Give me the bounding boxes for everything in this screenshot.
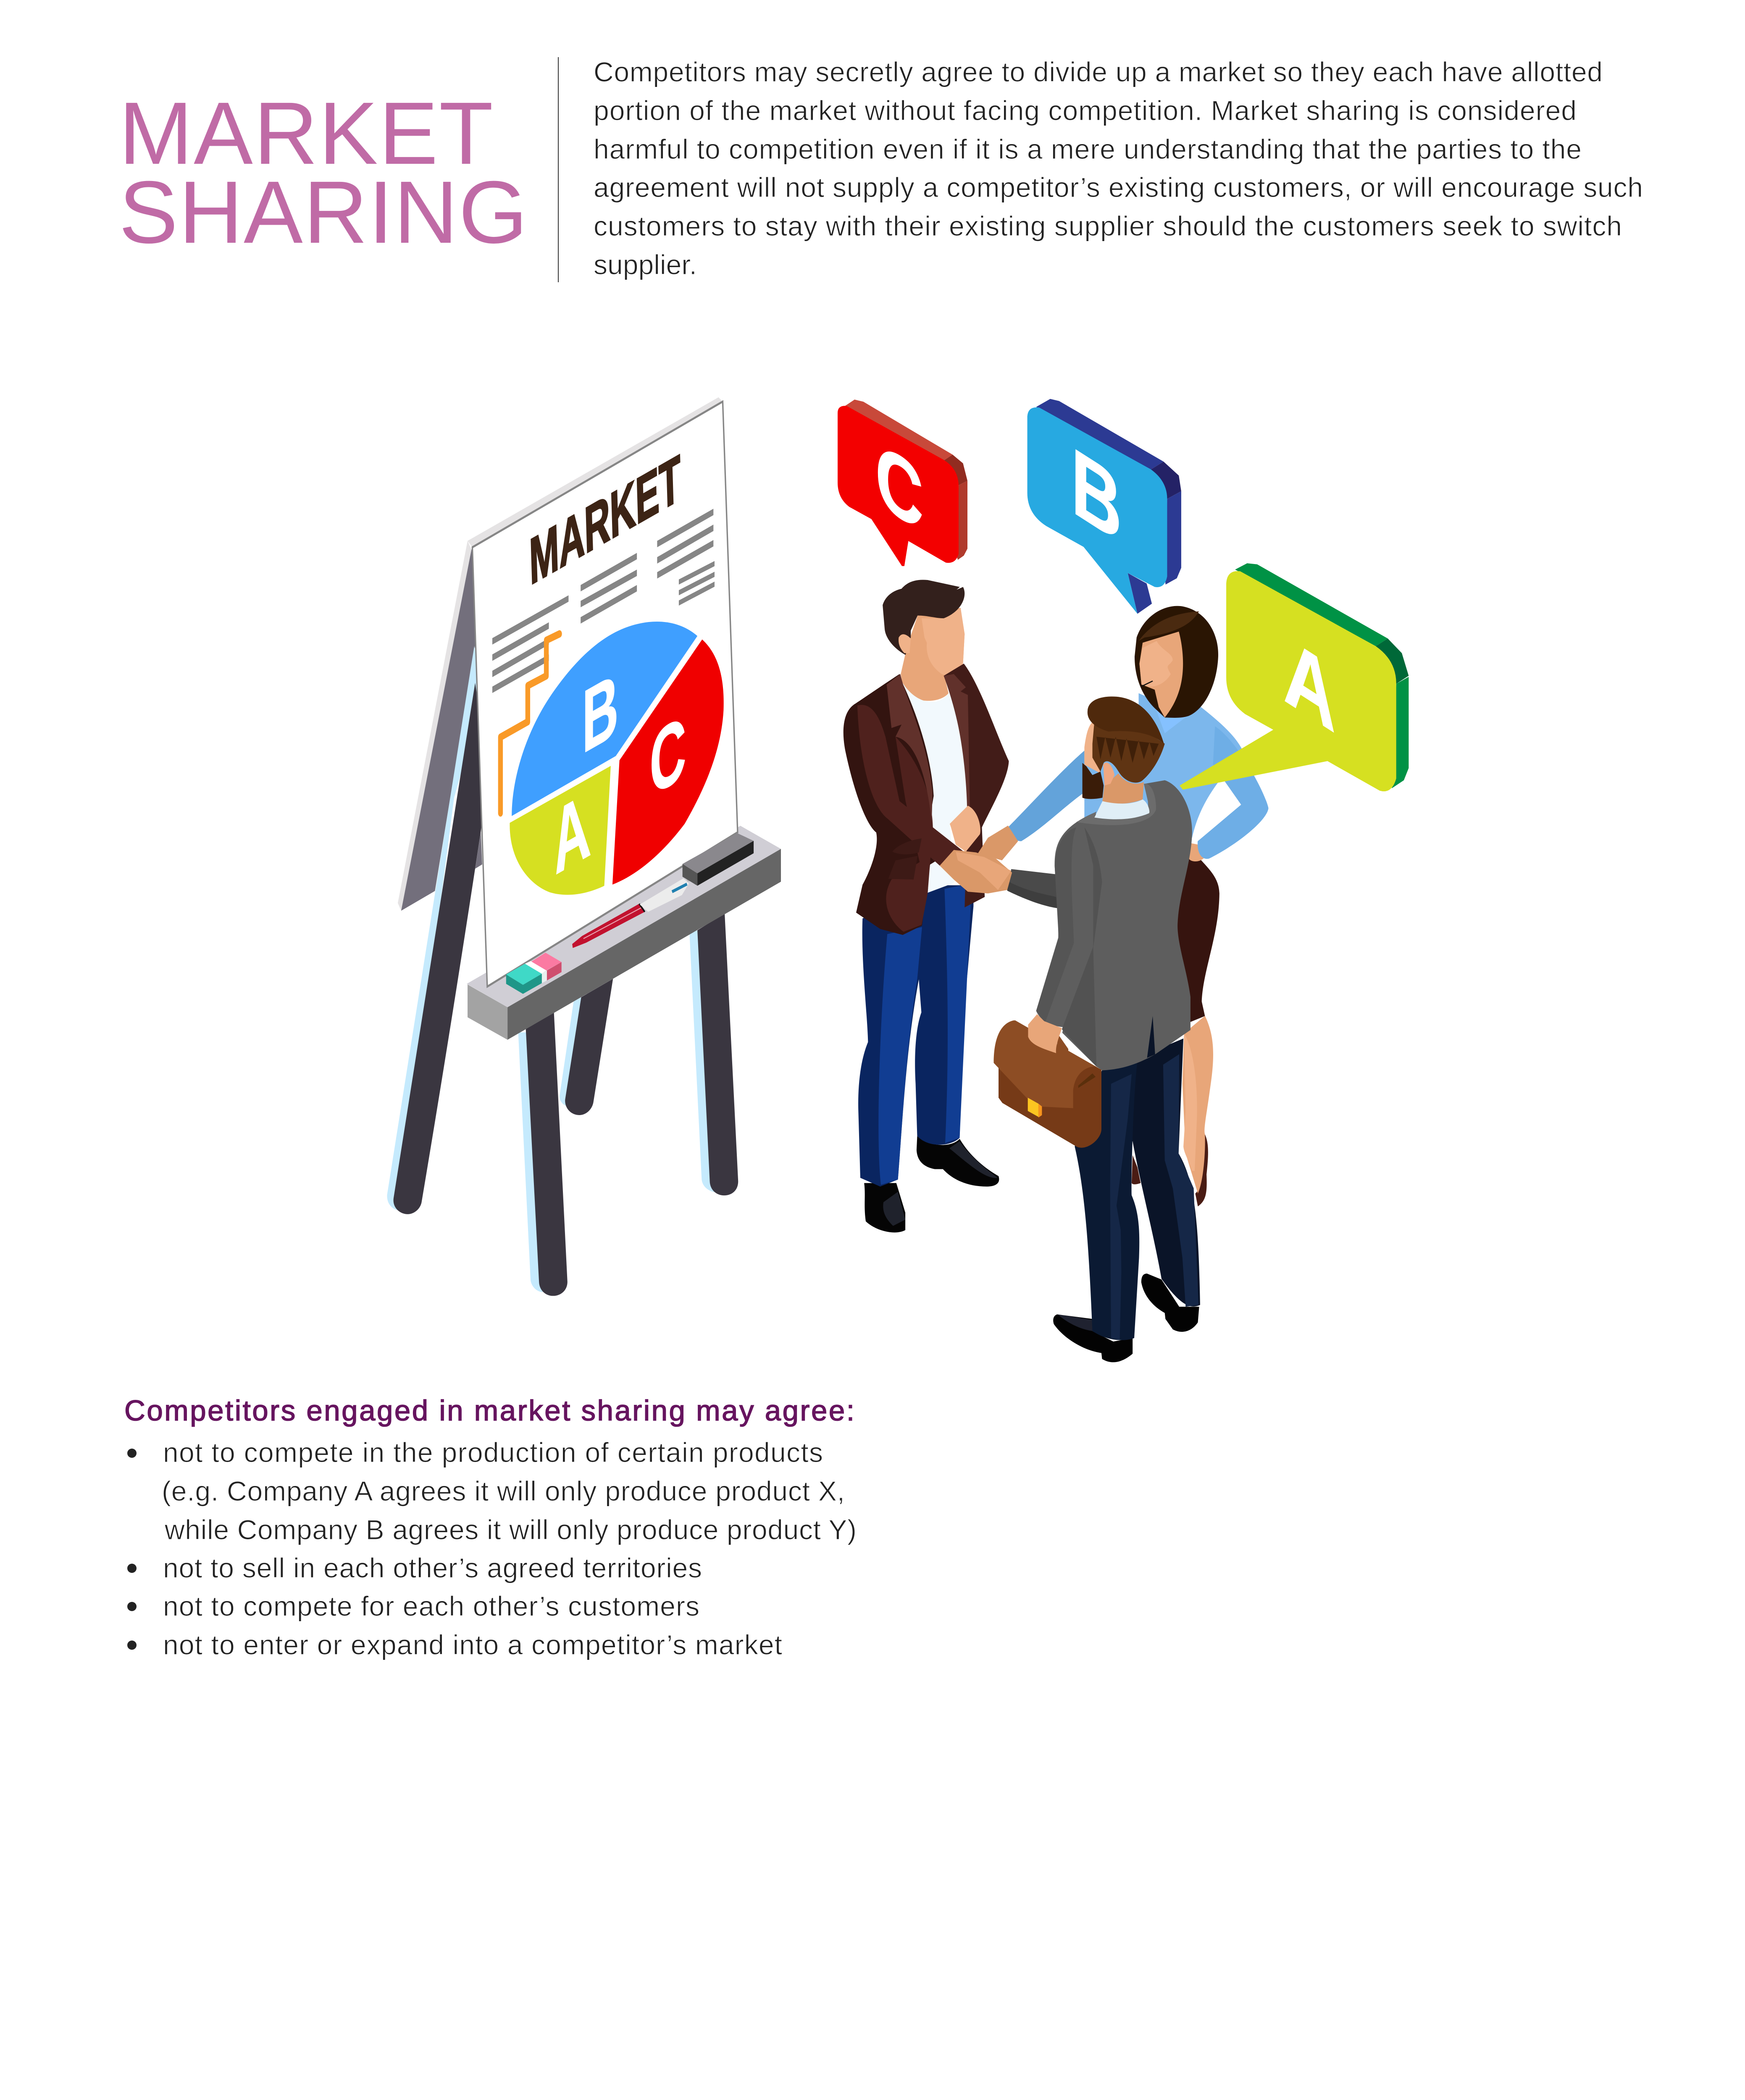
- bullet list: not to sell in each other’s agreed territories: [163, 1552, 702, 1583]
- title: MARKET: [119, 84, 493, 183]
- intro paragraph: customers to stay with their existing supplier should the customers seek to switch: [594, 210, 1622, 242]
- intro paragraph: Competitors may secretly agree to divide up a market so they each have allotted: [594, 56, 1603, 87]
- face: [1084, 719, 1101, 773]
- neck: [901, 608, 964, 701]
- grey jacket: [1036, 780, 1192, 1071]
- speech bubble B: [1028, 399, 1181, 614]
- ear: [899, 634, 911, 653]
- title: [119, 84, 528, 262]
- speech bubble A: A: [1283, 616, 1337, 753]
- intro paragraph: harmful to competition even if it is a mere understanding that the parties to the: [594, 134, 1582, 165]
- sleeve reaching to handshake: [1007, 869, 1057, 908]
- pie label C: C: [650, 696, 686, 816]
- woman blouse: [1084, 693, 1245, 838]
- intro paragraph: agreement will not supply a competitor’s existing customers, or will encourage such: [594, 172, 1643, 203]
- jacket pocket: [888, 838, 922, 879]
- section heading: Competitors engaged in market sharing may agree:: [124, 1394, 854, 1427]
- beard: [1083, 763, 1104, 799]
- intro paragraph: supplier.: [594, 249, 697, 280]
- hair tufts: [1096, 737, 1159, 763]
- pie label B: B: [582, 653, 618, 773]
- bullet list: not to compete for each other’s customers: [163, 1591, 699, 1622]
- T-shirt: [901, 681, 967, 893]
- woman face: [1139, 632, 1183, 718]
- bullet list: (e.g. Company A agrees it will only produce product X,: [162, 1475, 845, 1507]
- header divider: [558, 57, 559, 282]
- speech bubble A: [1180, 563, 1409, 791]
- neck: [1102, 773, 1144, 803]
- bullet list: [127, 1437, 857, 1660]
- speech bubble B: B: [1071, 427, 1122, 563]
- flip chart sheet: [468, 397, 738, 987]
- speech bubble C: C: [875, 423, 923, 551]
- briefcase: [994, 1014, 1101, 1148]
- pie chart: [510, 622, 724, 895]
- bullet list: not to compete in the production of certain products: [163, 1437, 823, 1468]
- handshake hands: [940, 850, 1012, 893]
- text lines on chart: [492, 509, 715, 693]
- orange line chart: [500, 634, 560, 813]
- title: SHARING: [119, 163, 528, 262]
- bullet list: while Company B agrees it will only produce product Y): [164, 1514, 857, 1545]
- hair: [883, 580, 964, 655]
- lower hair: [1093, 712, 1165, 782]
- person: woman: [1008, 606, 1269, 1206]
- pie label A: A: [549, 774, 593, 893]
- grey man trousers and shoes: [1053, 1039, 1200, 1362]
- woman legs and skirt: [1132, 1016, 1213, 1206]
- easel tray: [467, 826, 781, 1040]
- person: man in brown jacket: [844, 580, 1018, 1232]
- jacket vent: [1147, 1016, 1155, 1058]
- person: man in grey jacket with briefcase: [940, 696, 1200, 1362]
- chart heading: MARKET: MARKET: [528, 441, 682, 599]
- woman hair: [1135, 606, 1218, 718]
- illustration: market easel: [387, 397, 781, 1296]
- speech bubble C: [838, 399, 967, 566]
- shirt collar: [1094, 799, 1149, 819]
- face: [922, 609, 964, 675]
- ear: [1103, 763, 1114, 785]
- fist: [950, 806, 980, 852]
- easel back sheet: [398, 541, 482, 911]
- intro paragraph: [594, 56, 1643, 280]
- tray items: eraser, pen, marker: [506, 833, 754, 994]
- jacket: [844, 674, 954, 935]
- intro paragraph: portion of the market without facing competition. Market sharing is considered: [594, 95, 1577, 126]
- brown jacket man trousers and shoes: [858, 884, 999, 1232]
- bullets: [127, 1449, 137, 1650]
- bullet list: not to enter or expand into a competitor’s market: [163, 1629, 782, 1660]
- top hair: [1088, 696, 1164, 744]
- easel legs: [387, 646, 738, 1296]
